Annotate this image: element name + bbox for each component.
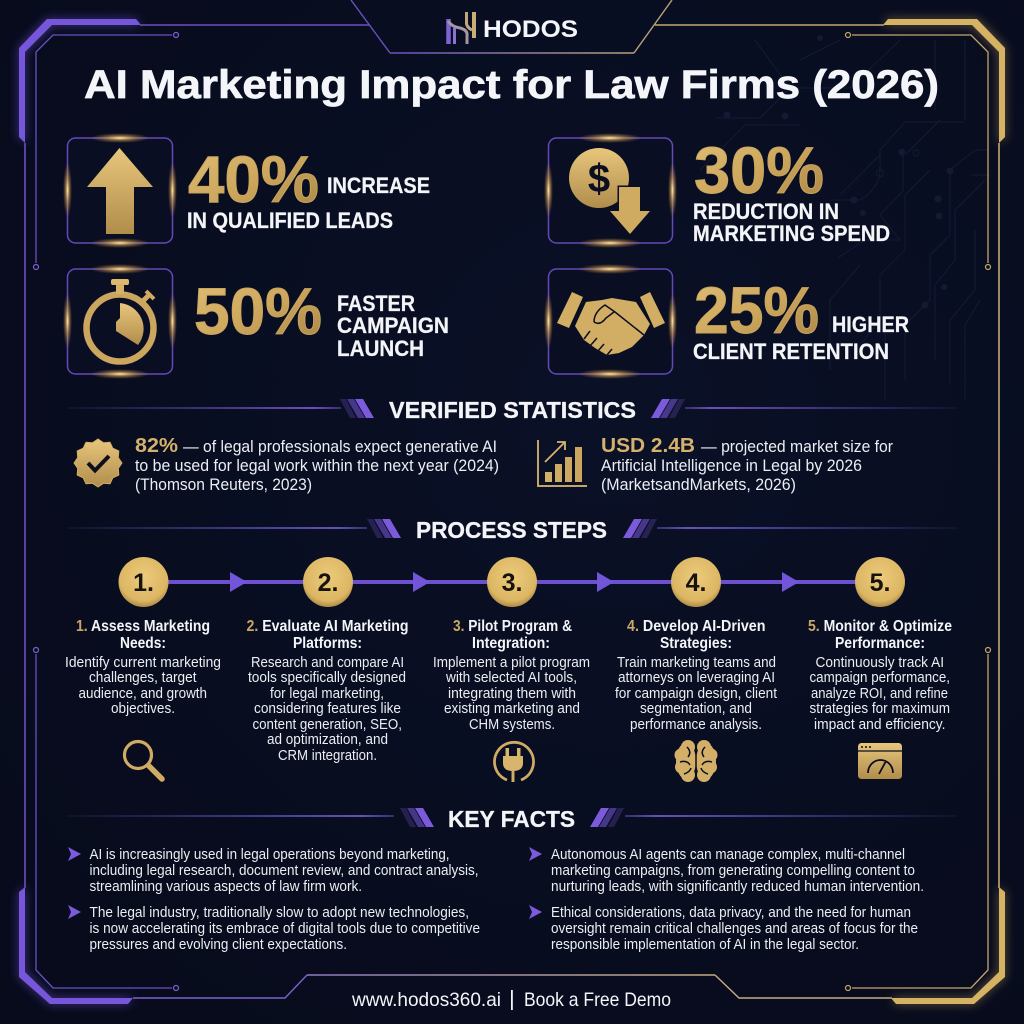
step 3 [433,618,590,782]
icon box: dollar with down arrow: $ [588,157,610,201]
stat label: INCREASE [327,173,430,198]
step text: for legal marketing, [270,685,384,702]
bullet [529,905,542,919]
step title: 5. Monitor & Optimize [808,618,952,635]
stat text: to be used for legal work within the next year (2024) [135,456,499,475]
icon: badge with check [74,439,122,487]
step text: objectives. [111,700,175,717]
fact text [90,847,478,895]
step text: segmentation, and [640,700,752,717]
fact text: Autonomous AI agents can manage complex, multi-channel [551,847,905,863]
section heading: key facts: KEY FACTS [448,806,575,832]
stat label: HIGHER [832,312,909,337]
fact text: marketing campaigns, from generating compelling content to [551,863,915,879]
icon: HODOS mark [448,12,474,44]
step marker 4 [671,557,721,607]
section heading: key facts [66,806,957,832]
section heading: process steps [67,517,958,543]
footer [351,989,671,1011]
stat label: REDUCTION IN [693,199,839,224]
step text: attorneys on leveraging AI [618,669,775,686]
fact text: pressures and evolving client expectations. [90,937,347,953]
step text: Train marketing teams and [617,654,776,671]
step text [810,654,950,733]
fact text: AI is increasingly used in legal operations beyond marketing, [90,847,450,863]
arrow [230,572,247,592]
stat text: — of legal professionals expect generative AI [183,437,497,456]
step title [808,618,952,652]
circuit board nodes [724,35,954,308]
step title: 4. Develop AI-Driven [627,618,766,635]
step text: integrating them with [448,685,576,702]
key fact 4 [529,905,918,953]
stat text: (Thomson Reuters, 2023) [135,475,312,494]
process timeline [118,557,905,607]
stat text [601,437,893,494]
icon: brain [674,740,718,782]
step title: Platforms: [293,635,362,652]
stat label line 2: MARKETING SPEND [693,221,890,246]
key fact 2 [68,905,480,953]
footer tab outline [133,975,892,998]
header tab outline [351,0,672,53]
stat panel: 30% reduction [544,133,890,248]
stat panel: 50% faster [63,264,449,379]
step text: audience, and growth [78,685,207,702]
stat label line 2: IN QUALIFIED LEADS [187,208,393,233]
step text [65,654,221,717]
frame: purple corners and left rail [19,19,370,1004]
step marker 5 [855,557,905,607]
icon box: handshake [544,264,677,379]
stat label line 2: CAMPAIGN [337,313,449,338]
verified stat: 82% [74,435,499,494]
section heading: verified statistics [67,397,958,423]
step text [433,654,590,733]
step text: Identify current marketing [65,654,221,671]
fact text [551,847,924,895]
step title: Needs: [120,635,166,652]
fact text: Ethical considerations, data privacy, and the need for human [551,905,911,921]
stat text [135,437,499,494]
step text: content generation, SEO, [252,716,402,733]
step text: existing marketing and [444,700,580,717]
icon box: stopwatch [63,264,177,379]
step 5 [808,618,952,779]
step text: CRM integration. [278,747,377,764]
fact text: oversight remain critical challenges and areas of focus for the [551,921,918,937]
step text: for campaign design, client [615,685,778,702]
step marker 3 [487,557,537,607]
stat figure: USD 2.4B [601,435,695,457]
fact text: responsible implementation of AI in the legal sector. [551,937,859,953]
fact text: The legal industry, traditionally slow to adopt new technologies, [90,905,469,921]
title: AI Marketing Impact for Law Firms (2026) [84,63,939,107]
step 1 [65,618,221,779]
step text: considering features like [254,700,401,717]
stat value: 30% [694,133,824,207]
stat value: 25% [694,273,819,347]
step text: analyze ROI, and refine [811,685,948,702]
step text [615,654,778,733]
icon box: up arrow [63,133,177,248]
arrow [413,572,430,592]
section heading: verified statistics: VERIFIED STATISTICS [389,397,636,423]
bullet [529,847,542,861]
step text: impact and efficiency. [814,716,946,733]
step text: Research and compare AI [251,654,404,671]
stat figure: 82% [135,435,178,457]
step text: with selected AI tools, [445,669,577,686]
fact text [90,905,480,953]
stat text: (MarketsandMarkets, 2026) [601,475,796,494]
bullet [68,847,81,861]
step title: 3. Pilot Program & [453,618,572,635]
fact text: nurturing leads, with significantly reduced human intervention. [551,879,924,895]
fact text: streamlining various aspects of law firm work. [90,879,362,895]
step marker 2 [303,557,353,607]
step title [246,618,408,652]
icon: magnifying glass [124,742,162,779]
verified stat: USD 2.4B [538,435,893,494]
step text [248,654,406,764]
key fact 1 [68,847,478,895]
step 2 [246,618,408,764]
step text: tools specifically designed [248,669,406,686]
frame: gold corners and right rail [655,19,1005,1004]
fact text [551,905,918,953]
circuit board background pattern [700,40,990,400]
step marker 1 [118,557,168,607]
step marker 4: 4. [686,569,706,597]
step marker 2: 2. [318,569,338,597]
stat label line 3: LAUNCH [337,336,424,361]
step title [453,618,572,652]
icon box: dollar with down arrow [544,133,677,248]
logo [448,12,578,44]
step text: ad optimization, and [267,731,388,748]
step text: Continuously track AI [816,654,944,671]
step title: 2. Evaluate AI Marketing [246,618,408,635]
step text: strategies for maximum [810,700,950,717]
key fact 3 [529,847,924,895]
step title: Performance: [835,635,925,652]
stat text: — projected market size for [701,437,893,456]
footer: www.hodos360.ai [351,989,501,1011]
stat text: Artificial Intelligence in Legal by 2026 [601,456,862,475]
arrow [782,572,799,592]
step title [76,618,210,652]
step text: performance analysis. [630,716,762,733]
step text: CHM systems. [469,716,555,733]
step text: Implement a pilot program [433,654,590,671]
icon: growth chart [538,440,587,486]
footer: Book a Free Demo [524,989,671,1011]
step title: Integration: [472,635,550,652]
stat value: 50% [194,274,322,348]
step text: campaign performance, [810,669,950,686]
brand name: HODOS [483,16,578,43]
step title [627,618,766,652]
stat label line 2: CLIENT RETENTION [693,339,889,364]
fact text: is now accelerating its embrace of digital tools due to competitive [90,921,480,937]
step 4 [615,618,778,782]
arrow [597,572,614,592]
icon: dashboard gauge [858,743,902,779]
stat panel: 40% increase [63,133,430,248]
icon: plug [494,742,534,782]
step marker 5: 5. [870,569,890,597]
step text: challenges, target [89,669,197,686]
section heading: process steps: PROCESS STEPS [416,517,607,543]
stat value: 40% [188,142,319,216]
step title: 1. Assess Marketing [76,618,210,635]
stat label: FASTER [337,291,415,316]
fact text: including legal research, document review, and contract analysis, [90,863,478,879]
step marker 1: 1. [133,569,154,597]
step marker 3: 3. [502,569,522,597]
bullet [68,905,81,919]
stat panel: 25% higher [544,264,909,379]
step title: Strategies: [660,635,732,652]
